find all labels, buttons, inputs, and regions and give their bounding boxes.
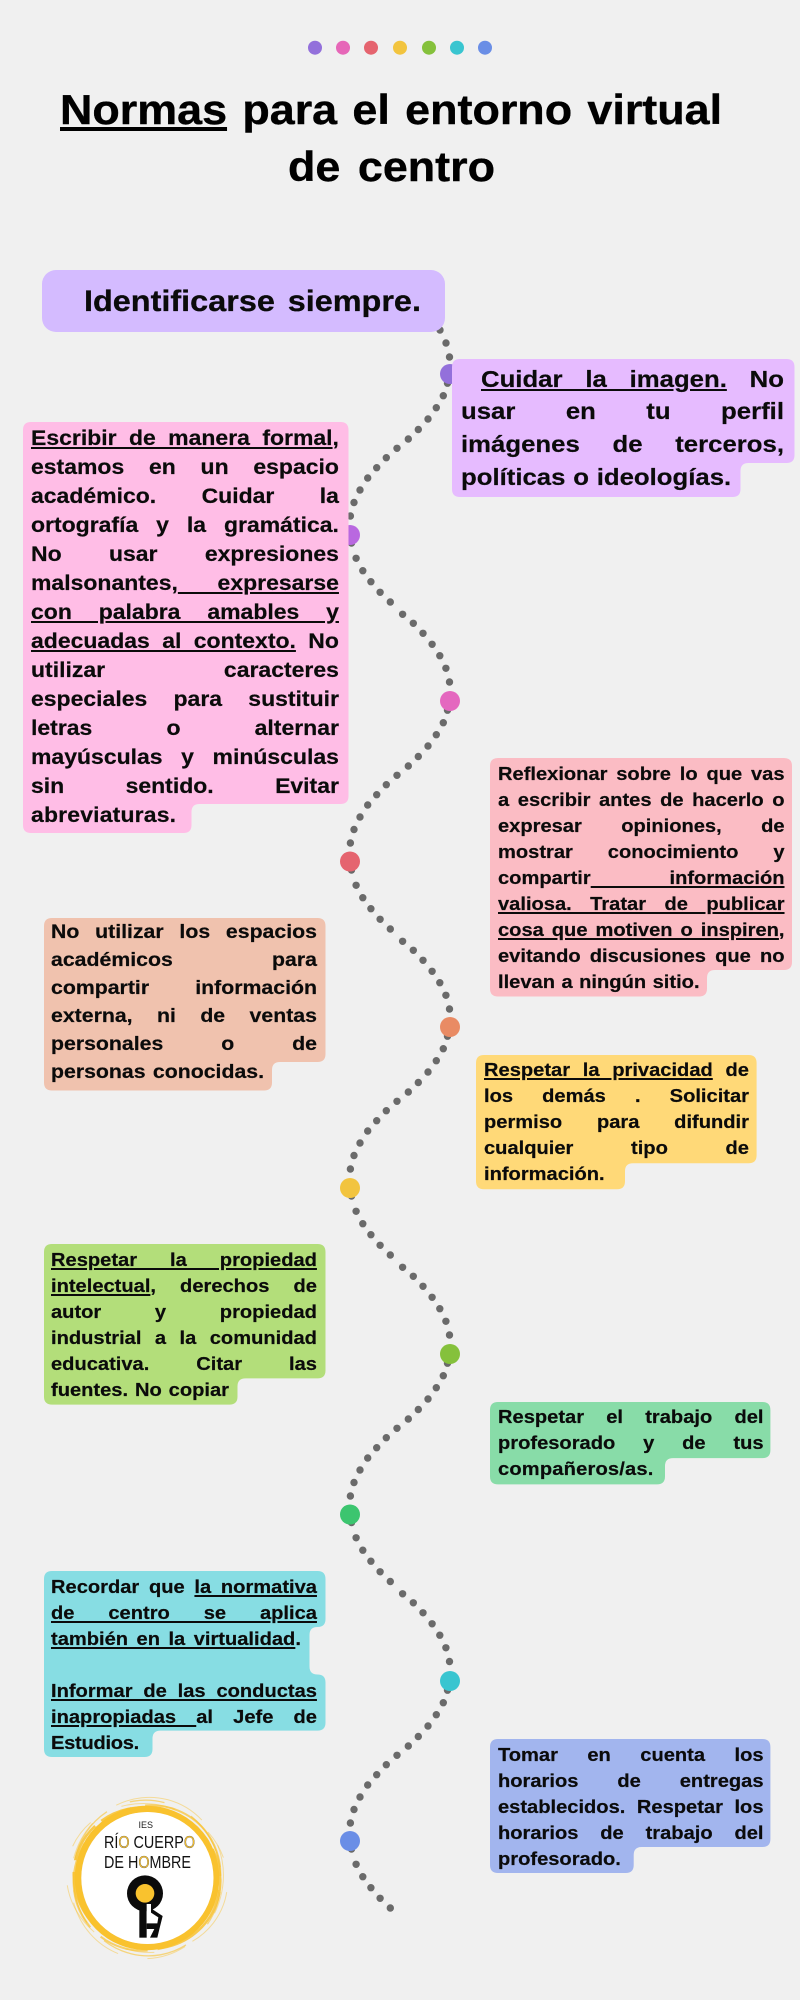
panel: respetar el trabajo bbox=[490, 1402, 770, 1484]
panel: horarios: Tomar en cuenta los bbox=[498, 1745, 763, 1765]
panel: reflexionar: expresar opiniones, de bbox=[498, 816, 784, 836]
panel: cuidar la imagen: políticas o ideologías. bbox=[461, 464, 731, 490]
panel: escribir de manera formal: estamos en un espacio bbox=[31, 456, 339, 479]
panel: normativa de centro: Recordar que la normativa bbox=[51, 1577, 317, 1597]
logo: IES Río Cuerpo de Hombre: RÍO CUERPO bbox=[104, 1832, 195, 1852]
panel: no utilizar espacios académicos: personales o de bbox=[51, 1034, 317, 1055]
panel: horarios: profesorado. bbox=[498, 1849, 620, 1869]
panel: reflexionar: compartir información bbox=[498, 868, 784, 888]
panel: escribir de manera formal: No usar expresiones bbox=[31, 543, 339, 566]
logo: IES Río Cuerpo de Hombre bbox=[66, 1796, 228, 1960]
panel: escribir de manera formal: especiales para sustituir bbox=[31, 688, 339, 711]
panel: identificarse siempre bbox=[42, 270, 445, 332]
panel: cuidar la imagen: usar en tu perfil bbox=[461, 398, 784, 424]
panel: reflexionar: mostrar conocimiento y bbox=[498, 842, 784, 862]
panel: respetar el trabajo: profesorado y de tus bbox=[498, 1433, 763, 1453]
panel: propiedad intelectual: autor y propiedad bbox=[51, 1302, 317, 1322]
panel: normativa de centro: Estudios. bbox=[51, 1733, 139, 1753]
panel: reflexionar: cosa que motiven o inspiren, bbox=[498, 920, 784, 940]
panel: escribir de manera formal: mayúsculas y minúsculas bbox=[31, 746, 339, 769]
panel: horarios bbox=[490, 1739, 770, 1873]
panel: escribir de manera formal: Escribir de manera formal, bbox=[31, 427, 339, 450]
panel: escribir de manera formal: sin sentido. Evitar bbox=[31, 775, 339, 798]
panel: horarios: establecidos. Respetar los bbox=[498, 1797, 763, 1817]
panel: no utilizar espacios académicos: personas conocidas. bbox=[51, 1062, 264, 1083]
panel: respetar la privacidad bbox=[476, 1055, 757, 1190]
panel: respetar la privacidad: Respetar la privacidad de bbox=[484, 1060, 749, 1080]
panel: escribir de manera formal: adecuadas al contexto. No bbox=[31, 630, 339, 653]
panel: propiedad intelectual: industrial a la comunidad bbox=[51, 1328, 317, 1348]
panel: escribir de manera formal: malsonantes, expresarse bbox=[31, 572, 339, 595]
panel: reflexionar: a escribir antes de hacerlo o bbox=[498, 790, 784, 810]
panel: no utilizar espacios académicos bbox=[44, 918, 326, 1090]
title bbox=[60, 86, 722, 190]
panel: horarios: horarios de trabajo del bbox=[498, 1823, 763, 1843]
decorative colour dots row bbox=[308, 40, 492, 55]
panel: no utilizar espacios académicos: No utilizar los espacios bbox=[51, 922, 317, 943]
panel: no utilizar espacios académicos: compartir información bbox=[51, 978, 317, 999]
panel: normativa de centro bbox=[44, 1571, 326, 1757]
title: Normas para el entorno virtual bbox=[60, 86, 722, 133]
panel: reflexionar: evitando discusiones que no bbox=[498, 946, 784, 966]
panel: normativa de centro: Informar de las conductas bbox=[51, 1681, 317, 1701]
panel: respetar la privacidad: permiso para difundir bbox=[484, 1112, 749, 1132]
panel: escribir de manera formal: con palabra amables y bbox=[31, 601, 339, 624]
title: de centro bbox=[288, 143, 495, 190]
panel: cuidar la imagen: imágenes de terceros, bbox=[461, 431, 784, 457]
panel: escribir de manera formal: académico. Cuidar la bbox=[31, 485, 339, 508]
logo: IES Río Cuerpo de Hombre: DE HOMBRE bbox=[104, 1852, 191, 1872]
panel: respetar la privacidad: cualquier tipo de bbox=[484, 1138, 749, 1158]
panel: propiedad intelectual: educativa. Citar las bbox=[51, 1354, 317, 1374]
panel: no utilizar espacios académicos: académicos para bbox=[51, 950, 317, 971]
panel: escribir de manera formal: abreviaturas. bbox=[31, 804, 176, 827]
panel: escribir de manera formal: ortografía y la gramática. bbox=[31, 514, 339, 537]
panel: cuidar la imagen bbox=[452, 359, 794, 497]
panel: horarios: horarios de entregas bbox=[498, 1771, 763, 1791]
panel: respetar el trabajo: compañeros/as. bbox=[498, 1459, 653, 1479]
panel: propiedad intelectual: intelectual, derechos de bbox=[51, 1276, 317, 1296]
panel: no utilizar espacios académicos: externa, ni de ventas bbox=[51, 1006, 317, 1027]
panel: propiedad intelectual bbox=[44, 1244, 326, 1405]
panel: normativa de centro: inapropiadas al Jefe de bbox=[51, 1707, 317, 1727]
panel: normativa de centro: de centro se aplica bbox=[51, 1603, 317, 1623]
panel: escribir de manera formal bbox=[23, 422, 348, 833]
panel: respetar la privacidad: información. bbox=[484, 1164, 605, 1184]
panel: propiedad intelectual: fuentes. No copiar bbox=[51, 1380, 229, 1400]
panel: identificarse siempre: Identificarse siempre. bbox=[84, 285, 421, 318]
panel: reflexionar: llevan a ningún sitio. bbox=[498, 972, 699, 992]
panel: escribir de manera formal: utilizar caracteres bbox=[31, 659, 339, 682]
panel: reflexionar: Reflexionar sobre lo que vas bbox=[498, 764, 784, 784]
panel: cuidar la imagen: Cuidar la imagen. No bbox=[481, 366, 784, 392]
panel: reflexionar bbox=[490, 758, 792, 996]
panel: normativa de centro: también en la virtualidad. bbox=[51, 1629, 301, 1649]
panel: respetar el trabajo: Respetar el trabajo del bbox=[498, 1407, 763, 1427]
panel: escribir de manera formal: letras o alternar bbox=[31, 717, 339, 740]
logo: IES Río Cuerpo de Hombre: IES bbox=[138, 1820, 153, 1830]
panel: reflexionar: valiosa. Tratar de publicar bbox=[498, 894, 784, 914]
panel: propiedad intelectual: Respetar la propiedad bbox=[51, 1250, 317, 1270]
panel: respetar la privacidad: los demás . Solicitar bbox=[484, 1086, 749, 1106]
